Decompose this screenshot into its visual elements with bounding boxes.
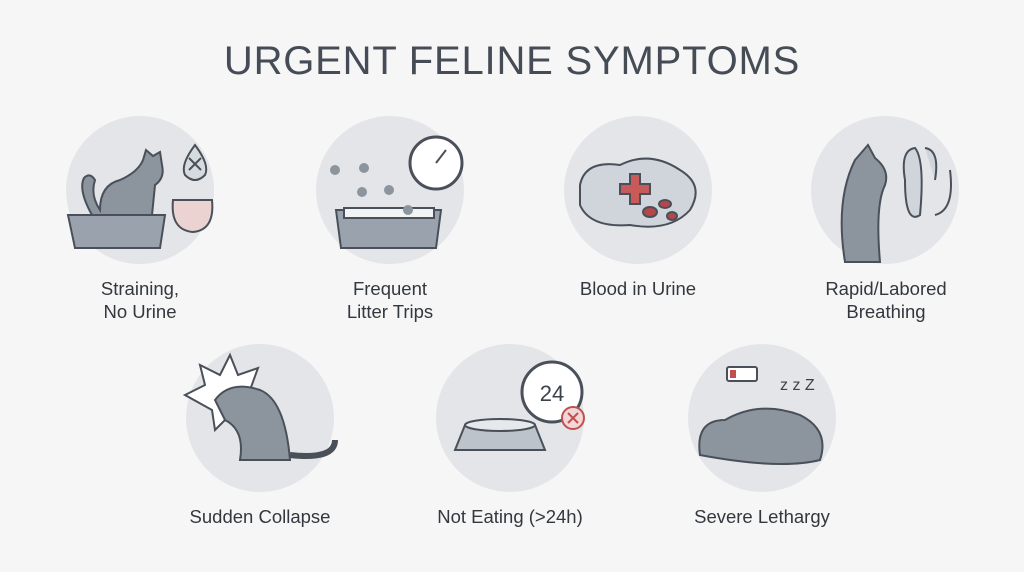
icon: lethargy: z z Z: [780, 377, 815, 394]
label: frequent trips: Litter Trips: [347, 301, 433, 322]
icon: sudden collapse: [185, 344, 335, 492]
label: straining: [101, 278, 179, 322]
icon: breathing: [811, 116, 959, 264]
label: straining: Straining,: [101, 278, 179, 299]
icon: straining cat in litter box: [66, 116, 214, 264]
label: blood: Blood in Urine: [580, 278, 696, 299]
icon: not eating: 24: [540, 381, 564, 406]
icon: frequent litter trips: [316, 116, 464, 264]
label: breathing: Breathing: [846, 301, 926, 322]
icon: blood in urine: [564, 116, 712, 264]
label: breathing: [825, 278, 947, 322]
icon: not eating: [436, 344, 584, 492]
label: straining: No Urine: [104, 301, 176, 322]
label: breathing: Rapid/Labored: [825, 278, 947, 299]
label: frequent trips: Frequent: [353, 278, 427, 299]
title: URGENT FELINE SYMPTOMS: [224, 39, 800, 83]
label: collapse: Sudden Collapse: [190, 506, 330, 527]
label: frequent trips: [347, 278, 433, 322]
label: not eating: Not Eating (>24h): [437, 506, 583, 527]
label: lethargy: Severe Lethargy: [694, 506, 830, 527]
icon: lethargy: [688, 344, 836, 492]
